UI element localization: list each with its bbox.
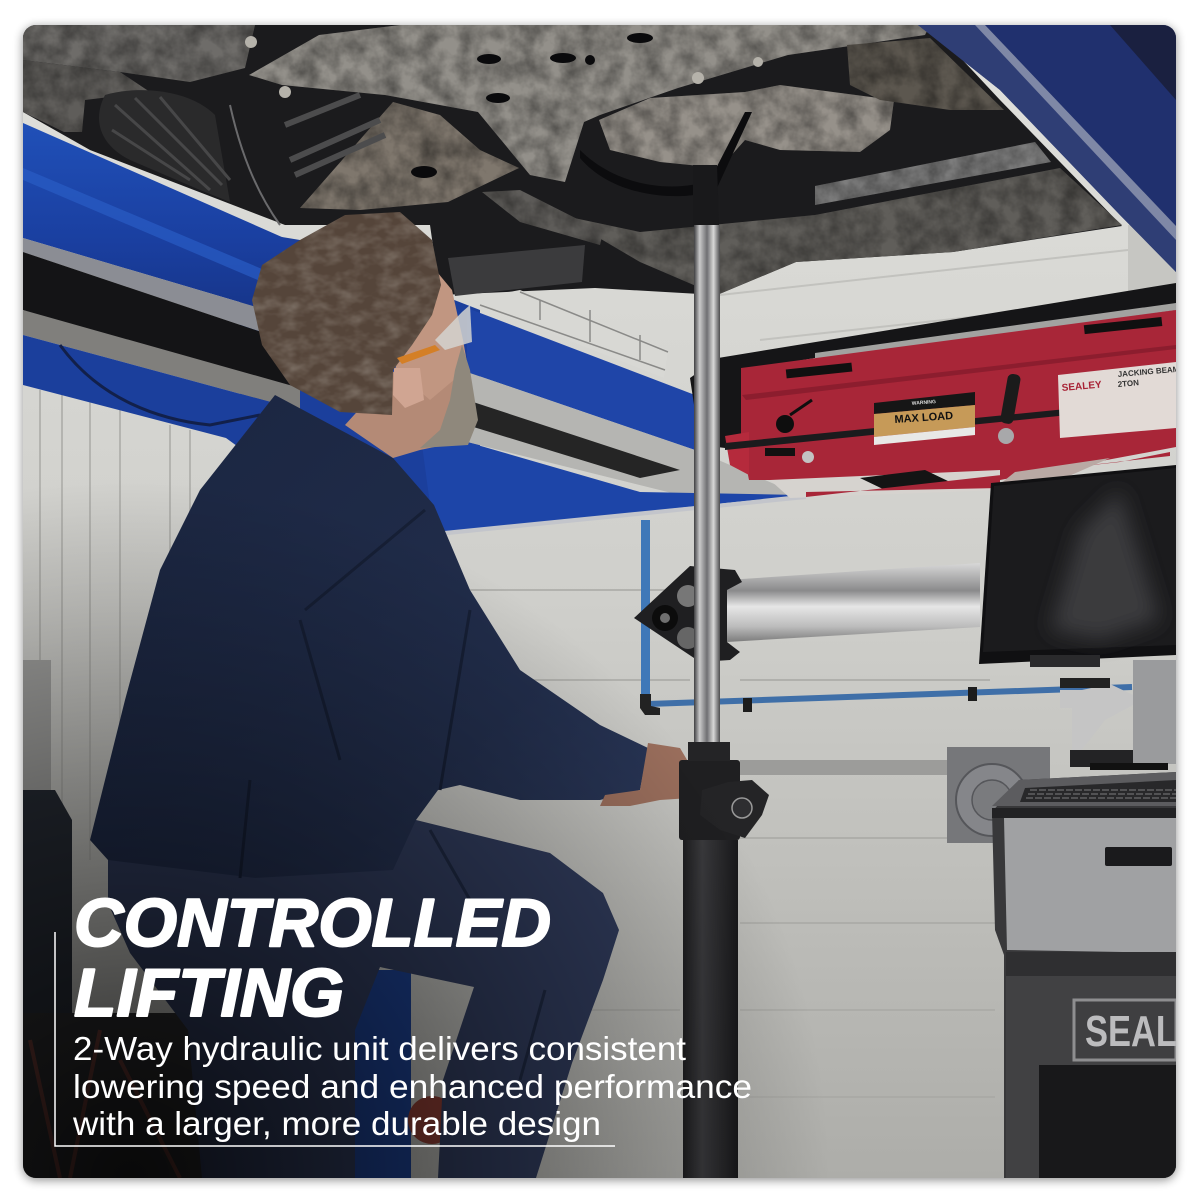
sump block xyxy=(448,245,585,296)
jacking beam label xyxy=(1058,362,1180,438)
jacking beam label: 2TON xyxy=(1117,378,1140,389)
blue lift runway xyxy=(23,123,806,536)
ear xyxy=(393,368,424,408)
body text: lowering speed and enhanced performance xyxy=(73,1068,752,1105)
hair xyxy=(252,212,441,415)
max load label: MAX LOAD xyxy=(894,410,954,426)
engine mount xyxy=(847,38,1004,110)
left side trolley xyxy=(23,790,203,1178)
beard xyxy=(420,345,478,448)
body text: 2-Way hydraulic unit delivers consistent xyxy=(73,1030,686,1067)
trouser crease xyxy=(430,830,545,1080)
jacking beam label: JACKING BEAM xyxy=(1117,365,1180,379)
car underbody xyxy=(23,25,1122,296)
rear lift arm xyxy=(918,25,1176,272)
body text xyxy=(72,1030,752,1142)
lower blue beam xyxy=(23,335,270,445)
runway base behind head xyxy=(240,236,480,500)
far blue beam xyxy=(467,308,695,450)
silver rails xyxy=(467,372,800,500)
wall target plate xyxy=(947,747,1050,843)
hand on jack handle xyxy=(600,743,696,806)
sweater xyxy=(90,395,648,878)
lower control arm xyxy=(300,102,519,210)
heading: controlled lifting: LIFTING xyxy=(74,955,344,1031)
silver edge xyxy=(23,238,259,331)
safety glasses xyxy=(397,305,472,364)
left bracket xyxy=(23,60,150,132)
locking knob xyxy=(700,780,769,838)
body text: with a larger, more durable design xyxy=(72,1105,601,1142)
text backdrop xyxy=(23,480,923,1178)
mechanic xyxy=(90,212,696,1178)
jack saddle strap xyxy=(580,112,752,196)
trousers xyxy=(108,820,619,1178)
under shield xyxy=(560,168,1122,295)
gearbox xyxy=(599,85,894,168)
sleeve folds xyxy=(240,510,470,878)
text bracket line xyxy=(55,932,615,1146)
face xyxy=(395,255,468,400)
heading: controlled lifting: CONTROLLED xyxy=(74,885,551,961)
neck xyxy=(345,360,468,458)
front tyre xyxy=(99,90,280,225)
red trolley wheel xyxy=(408,1096,442,1144)
suspension spring xyxy=(285,95,385,175)
cable tray xyxy=(510,290,524,292)
alignment machine cabinet: SEAL xyxy=(1085,1007,1177,1056)
upper blue beam xyxy=(23,123,283,306)
central plate xyxy=(249,25,930,182)
dark rail xyxy=(23,252,291,386)
top left panel xyxy=(23,25,255,82)
monitor arm bracket xyxy=(1060,660,1176,770)
monitor xyxy=(979,465,1176,667)
red jacking beam xyxy=(690,283,1176,498)
alignment machine cabinet xyxy=(992,772,1177,1178)
side arm xyxy=(482,190,603,245)
wheel alignment sensor bar xyxy=(634,563,980,662)
blue stand behind mechanic xyxy=(355,970,411,1178)
bottle jack column xyxy=(679,165,769,1178)
jacking beam label: SEALEY xyxy=(1061,380,1102,394)
max load label xyxy=(874,392,975,445)
max load label: WARNING xyxy=(912,399,936,407)
heading: controlled lifting xyxy=(74,885,551,1031)
blue air pipes xyxy=(640,520,1132,715)
grey cross member xyxy=(815,142,1051,205)
